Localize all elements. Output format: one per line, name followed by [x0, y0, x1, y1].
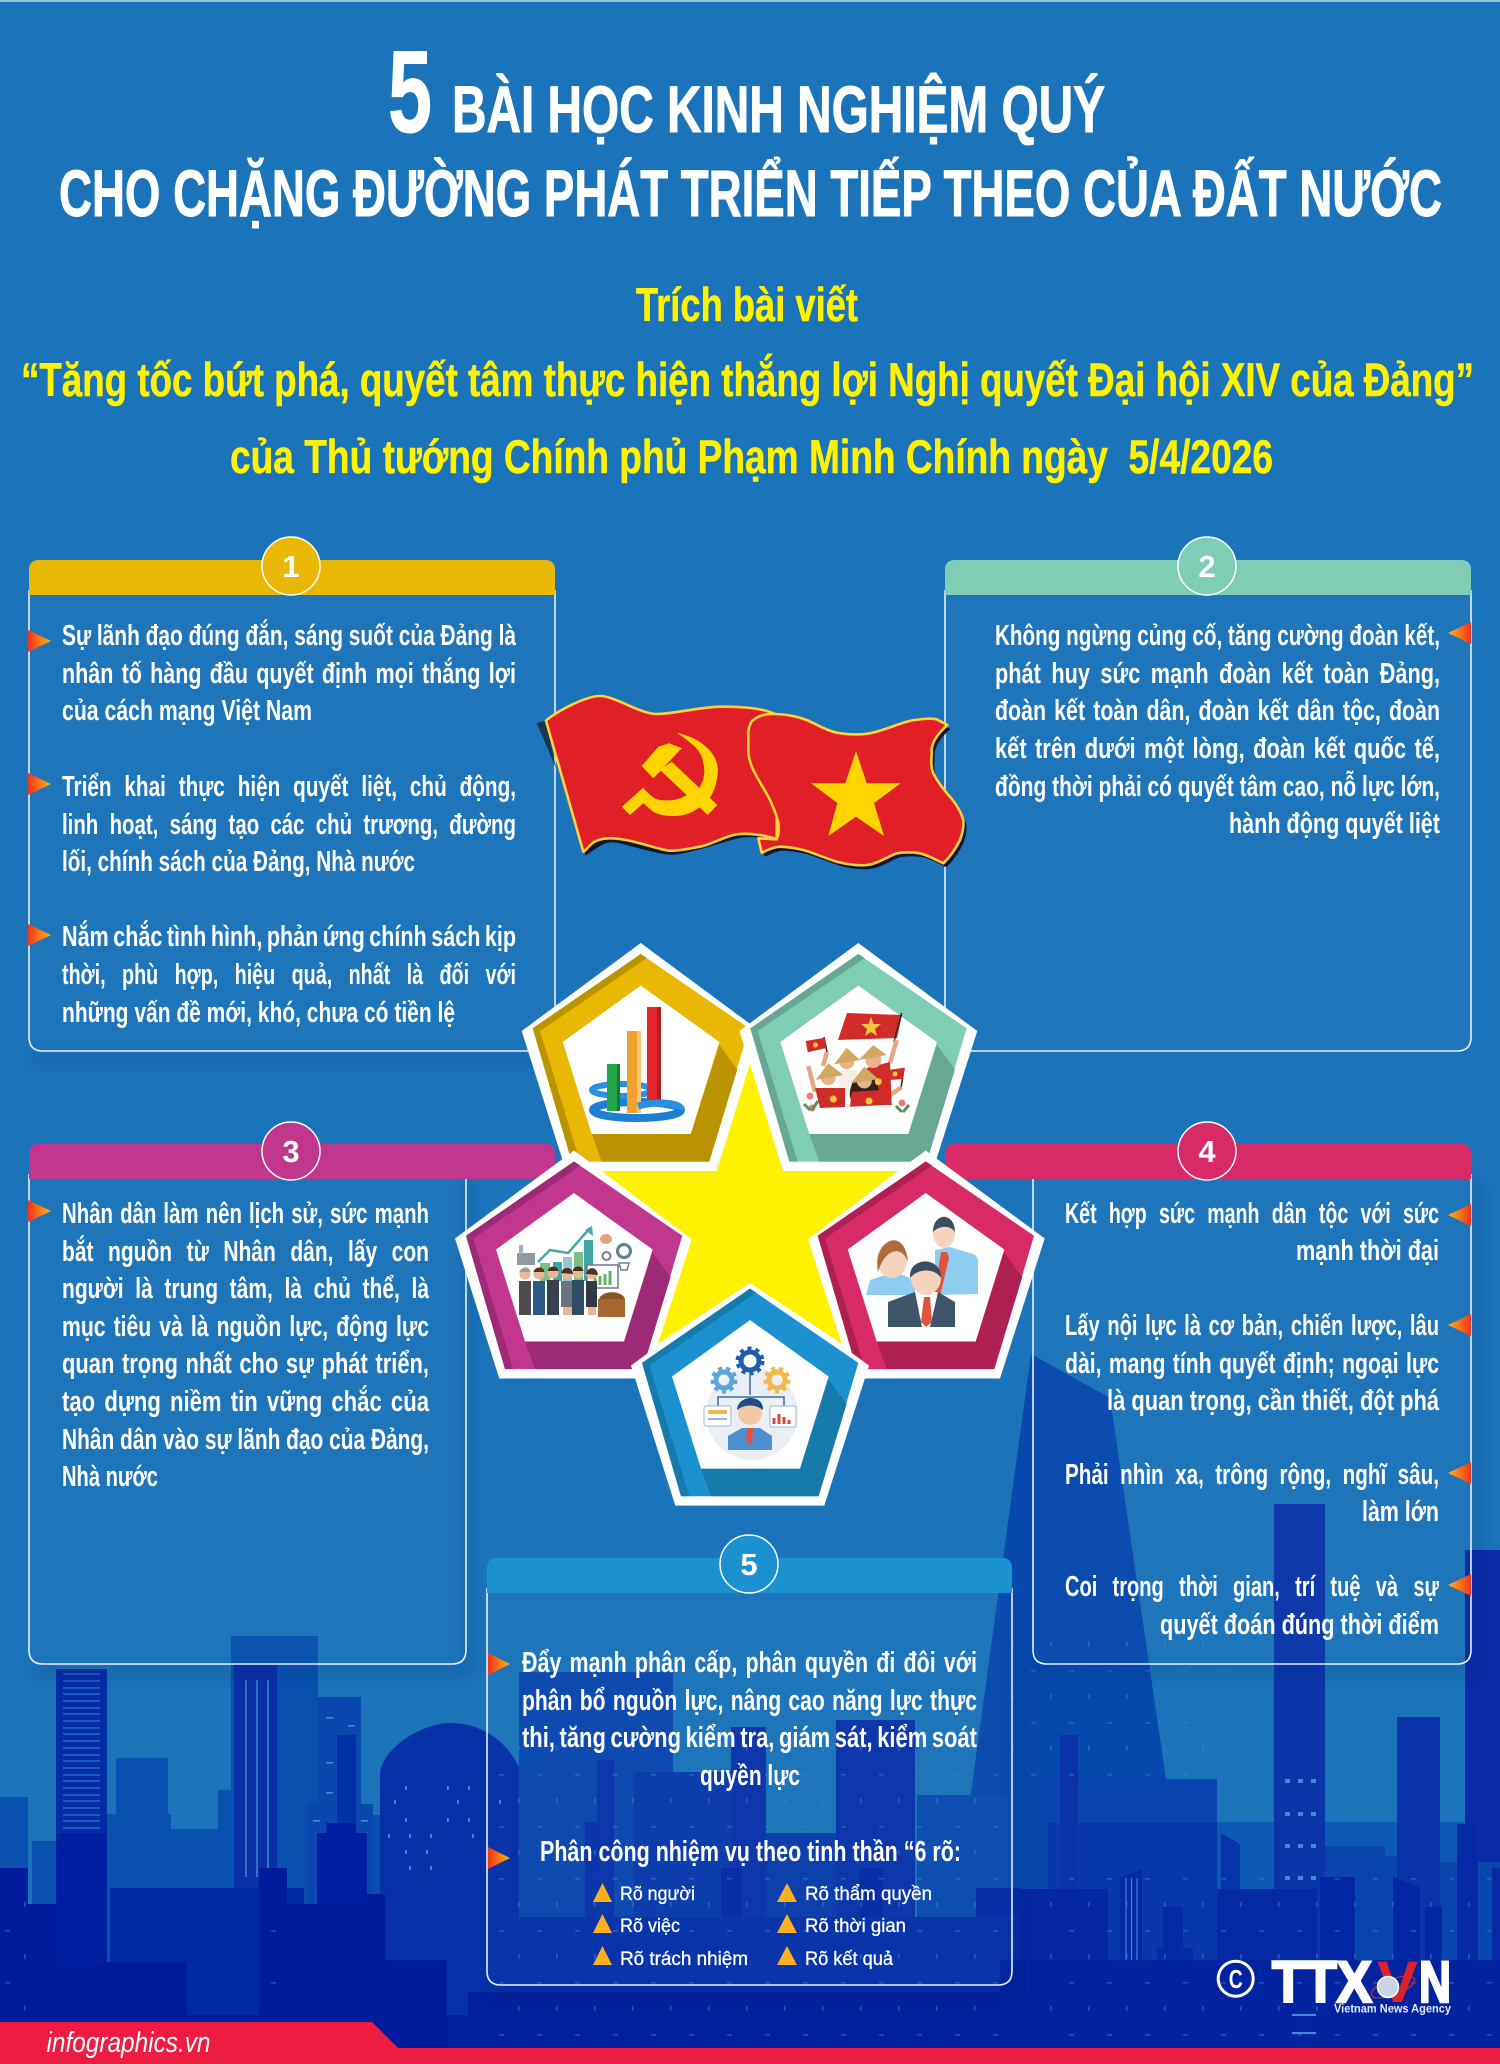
- number badge 4: 4: [1198, 1134, 1216, 1169]
- pentagon 4: three people: [807, 1150, 1045, 1378]
- bullet text 1.2: lối, chính sách của Đảng, Nhà nước: [62, 846, 415, 878]
- bullet text 1.2: linh hoạt, sáng tạo các chủ trương, đường: [62, 809, 516, 841]
- number badge 5: [720, 1535, 778, 1593]
- bullet text 4.3: [1065, 1459, 1471, 1528]
- bullet text 1.2: Triển khai thực hiện quyết liệt, chủ động,: [62, 771, 516, 803]
- pentagon 2: people with flags: [739, 943, 977, 1171]
- hammer and sickle: [622, 733, 718, 816]
- bullet text 1.3: Nắm chắc tình hình, phản ứng chính sách kịp: [62, 919, 516, 953]
- number badge 1: 1: [282, 549, 300, 584]
- bullet text 3: bắt nguồn từ Nhân dân, lấy con: [62, 1234, 429, 1268]
- bullet text 3: Nhân dân vào sự lãnh đạo của Đảng,: [62, 1424, 429, 1456]
- logo: TTXVN: C: [1229, 1964, 1243, 1994]
- bullet text 1.2: [28, 771, 516, 878]
- pentagon 5: manager with gears: [631, 1278, 869, 1506]
- bullet text 1.3: những vấn đề mới, khó, chưa có tiền lệ: [62, 997, 455, 1029]
- bullet text 5.2: Phân công nhiệm vụ theo tinh thần “6 rõ:: [540, 1836, 961, 1868]
- panel: lesson 4: [945, 1122, 1471, 1664]
- logo: TTXVN: N: [1419, 1950, 1451, 2015]
- panel: lesson 2: [945, 537, 1471, 1051]
- bullet text 4.3: làm lớn: [1362, 1496, 1439, 1528]
- six clear list: Rõ kết quả: [805, 1949, 893, 1970]
- icon: team and growth: [517, 1226, 630, 1317]
- panel: lesson 5: [487, 1535, 1012, 1985]
- bullet text 5.1: Đẩy mạnh phân cấp, phân quyền đi đôi với: [522, 1647, 977, 1679]
- title: 5: [388, 26, 432, 157]
- party flag: [537, 696, 779, 856]
- logo: TTXVN: [1218, 1950, 1451, 2016]
- six clear list: Rõ thời gian: [805, 1916, 906, 1937]
- bullet text 3: Nhà nước: [62, 1461, 158, 1493]
- flags: [537, 696, 966, 869]
- six clear list: Rõ việc: [620, 1916, 680, 1937]
- gold star: [811, 751, 901, 836]
- pentagon 1: growth chart: [522, 943, 760, 1171]
- bullet text 4.1: [1065, 1198, 1471, 1267]
- bullet text 5.1: quyền lực: [700, 1760, 800, 1792]
- logo: TTXVN: TTX: [1272, 1950, 1372, 2015]
- bullet text 1.3: [28, 919, 516, 1029]
- bullet text 3: tạo dựng niềm tin vững chắc của: [62, 1384, 430, 1418]
- card shadows: [29, 1060, 1478, 1994]
- bullet text 4.4: [1065, 1571, 1471, 1641]
- number badge 3: 3: [282, 1134, 300, 1169]
- number badge 2: 2: [1198, 549, 1216, 584]
- logo: TTXVN: V: [1377, 1950, 1418, 2015]
- number badge 1: [262, 537, 320, 595]
- bullet text 1.1: [28, 618, 517, 727]
- footer source: infographics.vn: [46, 2027, 210, 2059]
- footer bar: [0, 2022, 1500, 2064]
- bullet text 1.1: Sự lãnh đạo đúng đắn, sáng suốt của Đảng là: [62, 618, 517, 652]
- six clear list: Rõ thẩm quyền: [805, 1884, 932, 1905]
- bullet text 1.1: của cách mạng Việt Nam: [62, 695, 312, 727]
- bullet text 4.1: mạnh thời đại: [1296, 1235, 1439, 1267]
- number badge 3: [262, 1122, 320, 1180]
- bullet text 4.2: [1065, 1310, 1471, 1417]
- six clear list: Rõ trách nhiệm: [620, 1949, 748, 1970]
- six clear list: [593, 1883, 932, 1970]
- icon: crowd with flags: [804, 1013, 909, 1112]
- bullet text 3: mục tiêu và là nguồn lực, động lực: [62, 1311, 429, 1343]
- bullet text 3: quan trọng nhất cho sự phát triển,: [62, 1348, 429, 1380]
- number badge 5: 5: [740, 1547, 758, 1582]
- subtitle: [21, 278, 1474, 483]
- bullet text 1.1: nhân tố hàng đầu quyết định mọi thắng lợi: [62, 656, 516, 690]
- bullet text 5.1: [488, 1647, 977, 1792]
- skyline background: [0, 1354, 1500, 2064]
- panel: lesson 3: [28, 1122, 555, 1664]
- bullet text 5.2: [488, 1836, 961, 1869]
- logo: TTXVN: Vietnam News Agency: [1334, 2002, 1451, 2016]
- central yellow star: [602, 1064, 898, 1344]
- bullet text 3: [28, 1198, 430, 1493]
- number badge 4: [1178, 1122, 1236, 1180]
- bullet text 2: [995, 620, 1471, 840]
- subtitle: Trích bài viết: [636, 278, 858, 331]
- bullet text 3: Nhân dân làm nên lịch sử, sức mạnh: [62, 1198, 429, 1230]
- icon: three business people: [866, 1216, 978, 1327]
- icon: bars on rings: [592, 1007, 681, 1118]
- title: [59, 26, 1442, 230]
- bullet text 3: người là trung tâm, là chủ thể, là: [62, 1273, 430, 1305]
- bullet text 5.1: thi, tăng cường kiểm tra, giám sát, kiểm soát: [522, 1722, 977, 1754]
- bullet text 1.3: thời, phù hợp, hiệu quả, nhất là đối với: [62, 959, 516, 991]
- number badge 2: [1178, 537, 1236, 595]
- title: BÀI HỌC KINH NGHIỆM QUÝ: [452, 72, 1105, 146]
- panel: lesson 1: [28, 537, 555, 1051]
- national flag: [748, 714, 966, 869]
- icon: gears and manager: [704, 1348, 798, 1460]
- pentagon 3: business team: [455, 1150, 693, 1378]
- bullet text 5.1: phân bổ nguồn lực, nâng cao năng lực thực: [522, 1685, 977, 1717]
- six clear list: Rõ người: [620, 1884, 695, 1905]
